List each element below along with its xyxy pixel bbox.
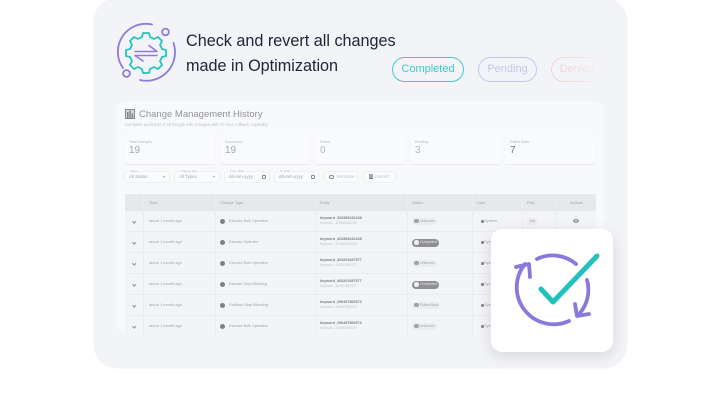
panel title [125, 108, 263, 120]
main card [94, 0, 627, 368]
table row 1: low [530, 219, 535, 223]
status pill: pending: Pending [487, 63, 528, 75]
heading [186, 32, 396, 74]
title text: Change Management History [139, 108, 263, 120]
stat: total changes: Total Changes [129, 140, 152, 144]
button: refresh [324, 171, 358, 183]
table row 6: System [484, 323, 497, 328]
status pill: denied: Denied [560, 63, 594, 75]
table row 4: keyword_403201687577 [320, 279, 362, 283]
stat: total changes [124, 135, 215, 164]
filter: status: All Status [129, 174, 148, 179]
table row 4: Completed [420, 282, 437, 286]
stat: successful: Successful [225, 140, 242, 144]
table header: User [477, 200, 485, 204]
icon: circular arrows with check mark [514, 254, 600, 326]
table row 1: System [484, 218, 497, 223]
filter: to date [274, 171, 319, 183]
table row 2: System [484, 239, 497, 244]
table row 4: System [484, 281, 497, 286]
stat: rolled back [505, 135, 596, 164]
table row 6: Unknown [420, 324, 435, 328]
exchange arrows [135, 46, 157, 61]
table row 3: System [484, 260, 497, 265]
table row 2: keyword_323365432238 [320, 237, 362, 241]
status pill: completed [392, 57, 464, 82]
stat: rolled back: 7 [510, 145, 516, 156]
stat: failed [315, 135, 406, 164]
stat: pending: 3 [415, 145, 421, 156]
table row 6: about 1 month ago [149, 323, 182, 328]
icon: gear with exchange arrows [116, 22, 176, 82]
table header: Risk [527, 200, 535, 204]
stat: rolled back: Rolled Back [510, 140, 529, 144]
table row 3 [125, 253, 596, 274]
stat: successful [220, 135, 310, 164]
table row 1 [125, 211, 596, 232]
table row 5 [125, 295, 596, 316]
table row 1: Keyword - 323365432238 [320, 221, 357, 225]
table row 5: System [484, 302, 497, 307]
stat: failed: Failed [320, 140, 330, 144]
filter: from date: From Date [230, 169, 244, 173]
filter: change type [174, 171, 220, 183]
table header: Time [149, 200, 158, 204]
status pill: pending [478, 57, 537, 82]
button: export [363, 171, 396, 183]
button: refresh: REFRESH [337, 175, 355, 179]
filter: status [124, 171, 170, 183]
table row 5: Rollback Stop Bleeding [229, 303, 268, 307]
panel subtitle: Complete audit trail of all Google Ads changes with 72-hour rollback capability [125, 122, 268, 127]
stat: pending [410, 135, 501, 164]
filter: change type: ▾ [213, 174, 215, 179]
icon: chart [125, 109, 135, 119]
filter: to date: dd-mm-yyyy [279, 174, 303, 179]
table row 5: keyword_296457500573 [320, 300, 362, 304]
table header: Entity [320, 200, 330, 204]
table row 3: Execute Bulk Operation [229, 261, 268, 265]
heading: Check and revert all changes [186, 32, 396, 50]
table row 6: Execute Bulk Operation [229, 324, 268, 328]
filter: change type: Change Type [180, 169, 198, 173]
filter: to date: To Date [280, 169, 290, 173]
status pill: completed: Completed [401, 63, 455, 75]
outer orbit arcs [118, 24, 175, 81]
gear [126, 33, 166, 73]
table row 4 [125, 274, 596, 295]
table row 2: Completed [420, 240, 437, 244]
table row 3: Unknown [420, 260, 435, 264]
table header: Change Type [220, 200, 243, 204]
filter: status: Status [130, 169, 139, 173]
table header: Actions [570, 200, 583, 204]
table row 2: Keyword - 323365432238 [320, 242, 357, 246]
button: export: EXPORT [375, 175, 390, 179]
table row 5: Keyword - 296457500573 [320, 305, 357, 309]
panel: change management history [116, 101, 604, 333]
table row 5: Rolled Back [420, 302, 439, 306]
table header [125, 194, 596, 211]
table row 2: about 1 month ago [149, 239, 182, 244]
filter: from date: dd-mm-yyyy [229, 174, 253, 179]
table row 1: keyword_323365432238 [320, 216, 362, 220]
icon: eye [573, 219, 579, 223]
table row 4: Execute Stop Bleeding [229, 282, 267, 286]
table row 3: about 1 month ago [149, 260, 182, 265]
filter: change type: All Types [179, 174, 197, 179]
stat: total changes: 19 [129, 145, 140, 156]
stat: successful: 19 [225, 145, 236, 156]
filter: status: ▾ [163, 174, 165, 179]
filter: from date [224, 171, 270, 183]
table row 1: Unknown [420, 218, 435, 222]
table row 3: Keyword - 403201687577 [320, 263, 357, 267]
table row 1: Execute Bulk Operation [229, 219, 268, 223]
table row 6: Keyword - 296457500573 [320, 326, 357, 330]
heading: made in Optimization [186, 56, 338, 74]
table row 6: keyword_296457500573 [320, 321, 362, 325]
stat: pending: Pending [415, 140, 428, 144]
table row 1: about 1 month ago [149, 218, 182, 223]
table row 2 [125, 232, 596, 253]
stat: failed: 0 [320, 145, 326, 156]
table row 3: keyword_403201687577 [320, 258, 362, 262]
status pill: denied [551, 57, 594, 82]
table header: Status [412, 200, 423, 204]
table row 2: Execute Optimize [229, 240, 258, 244]
table row 5: about 1 month ago [149, 302, 182, 307]
table row 6 [125, 316, 596, 337]
table row 4: Keyword - 403201687577 [320, 284, 357, 288]
callout: check icon card [491, 229, 613, 352]
table row 4: about 1 month ago [149, 281, 182, 286]
